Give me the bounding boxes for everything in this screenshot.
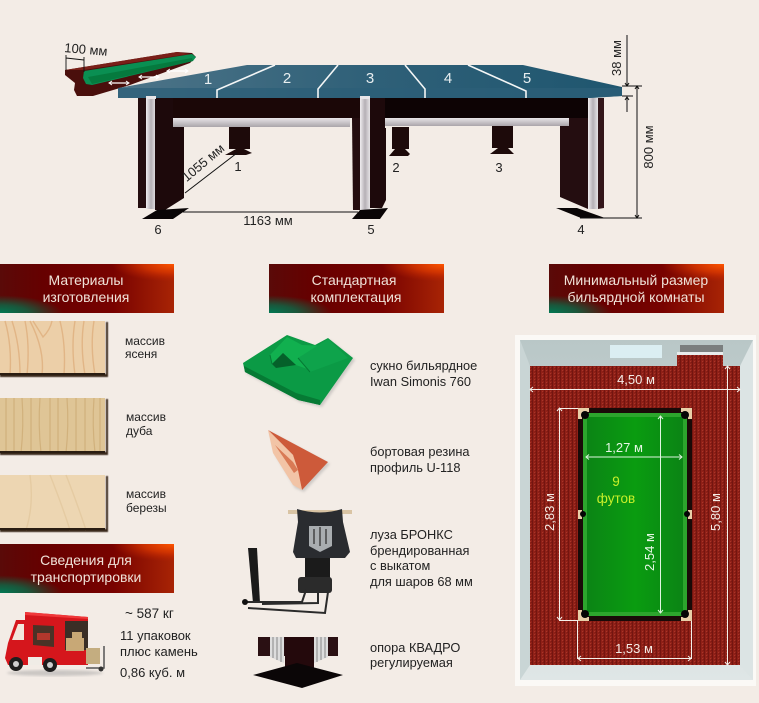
- leg numbers: [154, 159, 585, 237]
- icon: Bronx pocket: [242, 509, 352, 613]
- cushion width dimension: 100 мм: [64, 40, 108, 59]
- table size label: [597, 474, 635, 506]
- room width 4,50 m: 4,50 м: [617, 372, 655, 387]
- material labels: березы: [126, 501, 167, 515]
- clearance 2,83 m: 2,83 м: [542, 493, 557, 531]
- panel: room plan: [515, 335, 756, 686]
- room width 4,50 m: [530, 372, 740, 392]
- set labels: с выкатом: [370, 558, 430, 573]
- panel: materials: [0, 321, 167, 532]
- door: [677, 345, 723, 355]
- left leg: [138, 98, 189, 219]
- set labels: бортовая резина: [370, 444, 470, 459]
- panel: transport info: [5, 606, 198, 680]
- material labels: дуба: [126, 424, 153, 438]
- heading: materials: изготовления: [43, 289, 129, 305]
- set labels: [370, 358, 477, 670]
- carpet: [530, 353, 740, 665]
- leg numbers: 4: [577, 222, 585, 237]
- apron: [154, 98, 590, 127]
- heading: transport: Сведения для: [40, 552, 132, 568]
- set labels: опора КВАДРО: [370, 640, 460, 655]
- material labels: массив: [126, 487, 166, 501]
- icon: rubber cushion: [268, 430, 330, 492]
- transport data: ~ 587 кг: [125, 606, 174, 621]
- playfield length 2,54 m: [642, 416, 663, 613]
- table top: 2: [283, 70, 291, 87]
- leg numbers: 6: [154, 222, 162, 237]
- transport data: плюс камень: [120, 644, 198, 659]
- icon: folded cloth: [243, 335, 355, 407]
- cushion profile: [65, 52, 196, 96]
- room length 5,80 m: [708, 366, 730, 665]
- heading: room size: Минимальный размер: [564, 272, 708, 288]
- table top: 3: [366, 70, 374, 87]
- table top: 4: [444, 70, 452, 87]
- playfield width 1,27 m: [586, 440, 682, 460]
- clearance 1,53 m: [578, 621, 692, 661]
- dimension 800 mm: [580, 86, 656, 218]
- dimension 1163 mm: 1163 мм: [243, 213, 293, 228]
- table top: [118, 65, 622, 99]
- table size label: 9: [612, 474, 620, 489]
- set labels: для шаров 68 мм: [370, 574, 473, 589]
- dimension 800 mm: 800 мм: [641, 125, 656, 169]
- set labels: сукно бильярдное: [370, 358, 477, 373]
- dimension 38 mm: 38 мм: [609, 40, 624, 76]
- leg numbers: 1: [234, 159, 242, 174]
- ash wood sample: [0, 321, 108, 377]
- playfield length 2,54 m: 2,54 м: [642, 533, 657, 571]
- table top: 5: [523, 70, 531, 87]
- table top: 1: [204, 71, 212, 88]
- clearance 2,83 m: [542, 408, 578, 620]
- playfield width 1,27 m: 1,27 м: [605, 440, 643, 455]
- birch wood sample: [0, 475, 108, 532]
- dimension 38 mm: [609, 35, 642, 112]
- set labels: профиль U-118: [370, 460, 460, 475]
- set labels: регулируемая: [370, 655, 453, 670]
- heading: room size: бильярдной комнаты: [567, 289, 705, 305]
- set labels: луза БРОНКС: [370, 527, 453, 542]
- clearance 1,53 m: 1,53 м: [615, 641, 653, 656]
- icon: Quadro support: [253, 637, 343, 688]
- billiard table plan: [578, 408, 692, 621]
- heading: transport: [0, 544, 174, 593]
- room walls: [515, 335, 756, 686]
- dimension 1055 mm: [179, 141, 237, 193]
- icon: delivery truck: [5, 612, 104, 676]
- heading: materials: Материалы: [49, 272, 123, 288]
- table size label: футов: [597, 491, 635, 506]
- transport data: [120, 606, 198, 680]
- cushion width dimension: [64, 40, 108, 72]
- heading: standard set: комплектация: [311, 289, 401, 305]
- room length 5,80 m: 5,80 м: [708, 493, 723, 531]
- transport data: 0,86 куб. м: [120, 665, 185, 680]
- set labels: брендированная: [370, 543, 470, 558]
- heading: room size: [549, 264, 724, 313]
- dimension 1055 mm: 1055 мм: [179, 141, 227, 185]
- heading: standard set: [269, 264, 444, 313]
- material labels: массив: [126, 410, 166, 424]
- panel: standard set: [242, 335, 477, 688]
- material labels: [125, 334, 167, 515]
- billiard table with dimensions: [64, 35, 656, 237]
- leg numbers: 2: [392, 160, 400, 175]
- oak wood sample: [0, 398, 108, 455]
- window: [610, 345, 662, 358]
- heading: materials: [0, 264, 174, 313]
- material labels: ясеня: [125, 347, 157, 361]
- heading: standard set: Стандартная: [312, 272, 396, 288]
- heading: transport: транспортировки: [31, 569, 141, 585]
- transport data: 11 упаковок: [120, 628, 191, 643]
- middle leg: [352, 96, 388, 219]
- leg numbers: 5: [367, 222, 375, 237]
- right leg: [556, 98, 605, 218]
- material labels: массив: [125, 334, 165, 348]
- far legs: [225, 126, 514, 156]
- leg numbers: 3: [495, 160, 503, 175]
- set labels: Iwan Simonis 760: [370, 374, 471, 389]
